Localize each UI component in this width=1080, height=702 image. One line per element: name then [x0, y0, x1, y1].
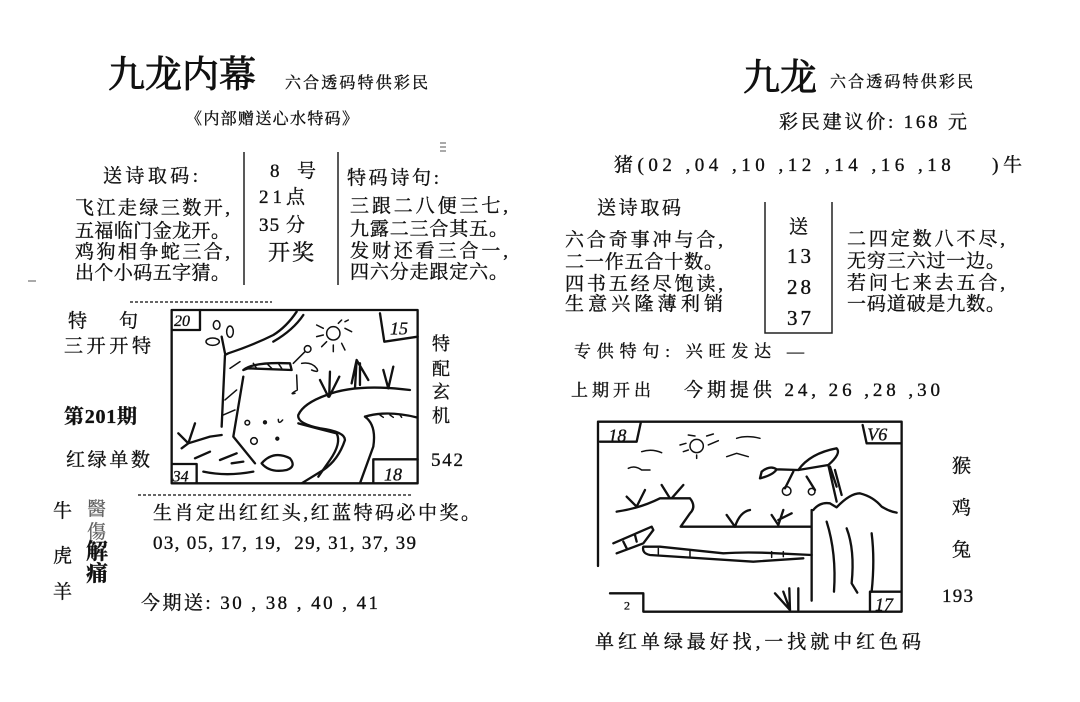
left draw time box [244, 152, 338, 285]
corner numbers: 17 [875, 595, 894, 615]
left side labels [64, 310, 151, 471]
zodiac column: 牛 [53, 500, 72, 522]
stamp: pain relief: 傷 [87, 521, 106, 543]
right poem: 二一作五合十数。 [565, 251, 723, 273]
suggested price: 彩民建议价: 168 元 [779, 111, 967, 133]
corner numbers: 18 [608, 426, 626, 446]
special phrase: 专供特句: 兴旺发达 — [574, 342, 805, 361]
left side code column [431, 334, 463, 471]
scan remnants [28, 143, 446, 495]
right second poem: 二四定数八不尽, [847, 228, 1005, 250]
left side labels: 第201期 [64, 405, 137, 428]
right number box [765, 202, 832, 333]
left side labels: 红绿单数 [66, 449, 150, 471]
zodiac number row: 猪(02 ,04 ,10 ,12 ,14 ,16 ,18 )牛 [614, 154, 1022, 176]
right poem [565, 229, 723, 315]
right second poem: 若问七来去五合, [847, 272, 1005, 294]
left title: 九龙内幕 [108, 54, 256, 96]
left numbers: 03, 05, 17, 19, 29, 31, 37, 39 [153, 533, 416, 554]
left poem: 飞江走绿三数开, [75, 197, 230, 219]
corner numbers: 18 [384, 465, 402, 485]
right sketch: waterfall landscape [598, 422, 902, 615]
corner numbers [172, 313, 408, 486]
stamp: pain relief: 醫 [87, 498, 106, 520]
left book title: 《内部赠送心水特码》 [186, 110, 358, 128]
special poem: 三跟二八便三七, [350, 195, 508, 217]
right poem: 生意兴隆薄利销 [565, 293, 723, 315]
previous and current numbers: 今期提供 24, 26 ,28 ,30 [684, 379, 940, 401]
left draw time box: 21点 [259, 186, 306, 208]
previous and current numbers [571, 379, 940, 401]
right number box: 送 [789, 216, 808, 238]
zodiac column: 虎 [53, 545, 72, 567]
left subtitle: 六合透码特供彩民 [285, 74, 428, 92]
right second poem [847, 228, 1005, 315]
right number box: 37 [787, 306, 811, 330]
special poem: 四六分走跟定六。 [350, 261, 508, 283]
special poem: 发财还看三合一, [350, 240, 508, 262]
stamp: pain relief: 痛 [86, 561, 108, 586]
left draw time box: 35 分 [259, 214, 305, 236]
right poem: 六合奇事冲与合, [565, 229, 723, 251]
left draw time box: 开奖 [268, 240, 314, 265]
right footer note: 单红单绿最好找,一找就中红色码 [595, 631, 921, 653]
left sketch: river landscape [172, 310, 418, 486]
left side labels: 三开开特 [64, 335, 151, 357]
special poem [350, 195, 508, 283]
left side code column: 542 [431, 450, 463, 471]
right number box: 28 [787, 275, 811, 299]
right title: 九龙 [743, 57, 817, 99]
right poem heading: 送诗取码 [597, 197, 681, 219]
left poem: 出个小码五字猜。 [75, 262, 230, 284]
stamp: pain relief [86, 498, 108, 586]
left side code column: 玄 [432, 382, 450, 402]
right side code column: 猴 [952, 455, 971, 477]
corner numbers: V6 [867, 425, 887, 445]
zodiac sentence: 生肖定出红红头,红蓝特码必中奖。 [153, 502, 480, 524]
corner numbers: 15 [390, 319, 408, 339]
right side code column [942, 455, 973, 607]
corner numbers: 34 [172, 469, 189, 486]
left side code column: 特 [432, 334, 450, 354]
right second poem: 无穷三六过一边。 [847, 250, 1005, 272]
corner numbers: 2 [624, 598, 630, 612]
left draw time box: 8 号 [270, 160, 316, 182]
right side code column: 兔 [952, 539, 971, 561]
right number box: 13 [787, 244, 811, 268]
this issue numbers: 今期送: 30 , 38 , 40 , 41 [141, 592, 378, 614]
right subtitle: 六合透码特供彩民 [830, 73, 973, 91]
left side code column: 机 [432, 406, 450, 426]
right poem: 四书五经尽饱读, [565, 273, 723, 295]
corner numbers [608, 425, 894, 615]
special poem heading: 特码诗句: [347, 167, 439, 189]
left poem: 鸡狗相争蛇三合, [75, 241, 230, 263]
special poem: 九露二三合其五。 [350, 218, 508, 240]
left poem: 五福临门金龙开。 [75, 220, 230, 242]
left side code column: 配 [432, 359, 450, 379]
left side labels: 特 句 [68, 310, 138, 332]
right second poem: 一码道破是九数。 [847, 293, 1005, 315]
previous and current numbers: 上期开出 [571, 381, 651, 400]
left poem heading: 送诗取码: [103, 165, 198, 187]
left poem [75, 197, 230, 284]
corner numbers: 20 [174, 313, 190, 330]
zodiac column: 羊 [53, 581, 72, 603]
right side code column: 193 [942, 586, 973, 607]
zodiac column [53, 500, 72, 603]
stamp: pain relief: 解 [86, 539, 108, 564]
right side code column: 鸡 [952, 497, 971, 519]
